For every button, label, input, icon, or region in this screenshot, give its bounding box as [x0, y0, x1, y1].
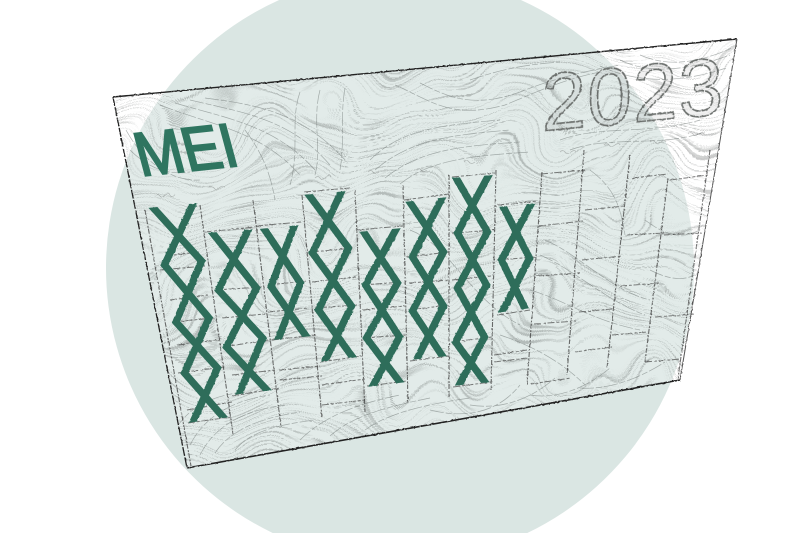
calendar sheet	[112, 38, 738, 469]
drawn flow curves	[126, 48, 732, 455]
cell lines	[160, 170, 708, 423]
column 5 crosses	[359, 222, 405, 393]
calendar grid	[145, 132, 710, 466]
column 7 crosses	[452, 169, 492, 393]
column 2 crosses	[207, 222, 273, 402]
month heading: MEI	[127, 112, 245, 190]
crossed-off days	[148, 169, 535, 429]
column 4 crosses	[304, 184, 358, 369]
year heading: 2023	[541, 40, 723, 148]
flow line texture	[114, 40, 736, 468]
illustration: calendar on circle	[106, 0, 738, 533]
column 6 crosses	[405, 190, 447, 367]
sheet paper	[113, 39, 737, 468]
sheet outline	[113, 39, 737, 468]
column 1 crosses	[148, 197, 229, 429]
column 8 crosses	[498, 196, 535, 320]
column lines	[145, 150, 710, 466]
background circle	[106, 0, 694, 533]
column 3 crosses	[260, 225, 311, 340]
month headers	[155, 132, 704, 197]
